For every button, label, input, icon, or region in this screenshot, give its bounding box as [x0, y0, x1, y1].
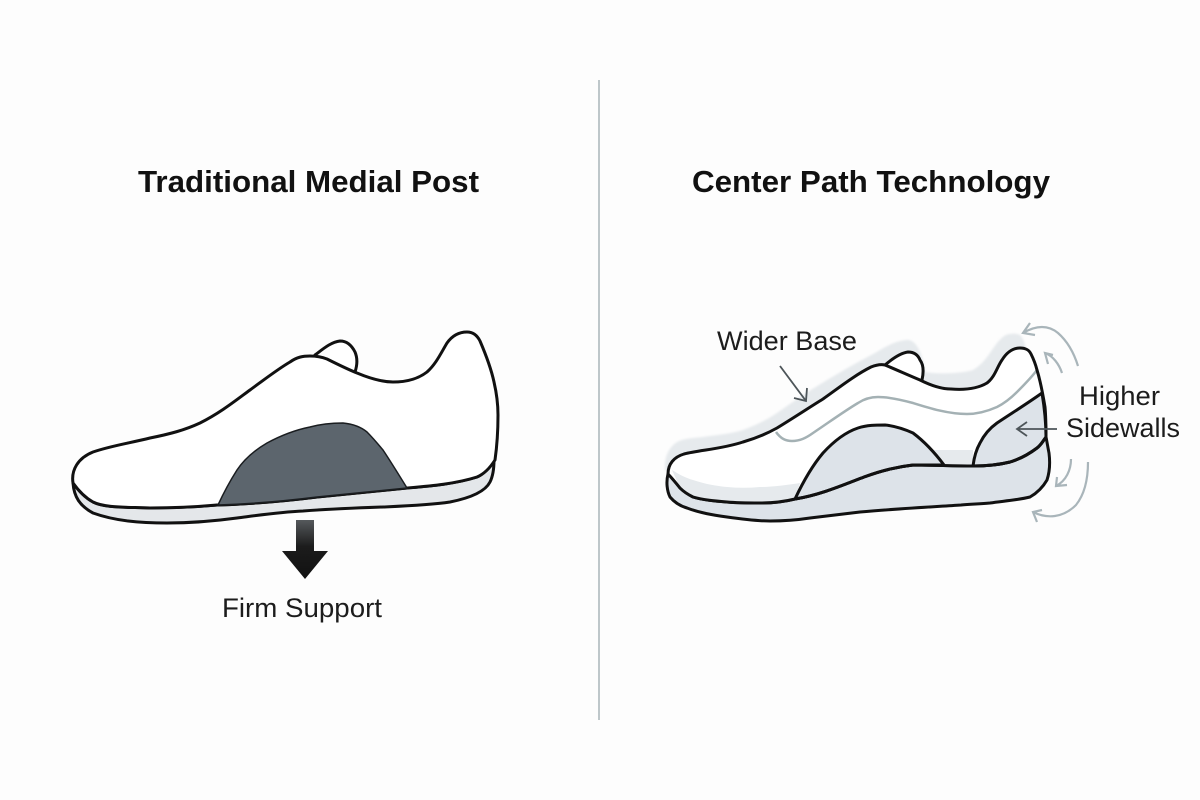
upper: [73, 332, 498, 508]
curve upper outer: [1023, 323, 1078, 366]
heading: Center Path Technology: Center Path Technology: [692, 164, 1051, 199]
divider: [598, 80, 600, 720]
tongue: [315, 341, 357, 372]
arrow: wider base: [780, 366, 807, 401]
upper fill: [668, 348, 1046, 503]
midsole: [667, 437, 1050, 521]
sole: [73, 460, 494, 523]
toe shading: [672, 470, 800, 503]
arch panel: [795, 425, 944, 499]
curve lower inner: [1056, 459, 1071, 486]
label: Higher Sidewalls: Sidewalls: [1066, 413, 1180, 443]
label: Higher Sidewalls: Higher: [1079, 381, 1160, 411]
heel panel: [973, 393, 1046, 466]
label: Wider Base: Wider Base: [717, 326, 857, 356]
arrow: firm support: [282, 520, 328, 579]
panel: traditional shoe: [73, 332, 498, 523]
medial post: [218, 423, 407, 505]
mid shading band: [930, 450, 973, 466]
tongue: [885, 352, 923, 380]
halo: [665, 334, 1040, 480]
curve upper inner: [1045, 353, 1062, 373]
panel: center path shoe: [665, 334, 1050, 521]
contour line: [776, 370, 1037, 441]
label: Firm Support: Firm Support: [222, 593, 383, 623]
heading: Traditional Medial Post: Traditional Medial Post: [138, 164, 479, 199]
arrow: higher sidewalls: [1017, 422, 1057, 436]
arrows: sidewall curves: [1023, 323, 1088, 522]
upper outline: [668, 348, 1046, 503]
curve lower outer: [1033, 462, 1088, 522]
